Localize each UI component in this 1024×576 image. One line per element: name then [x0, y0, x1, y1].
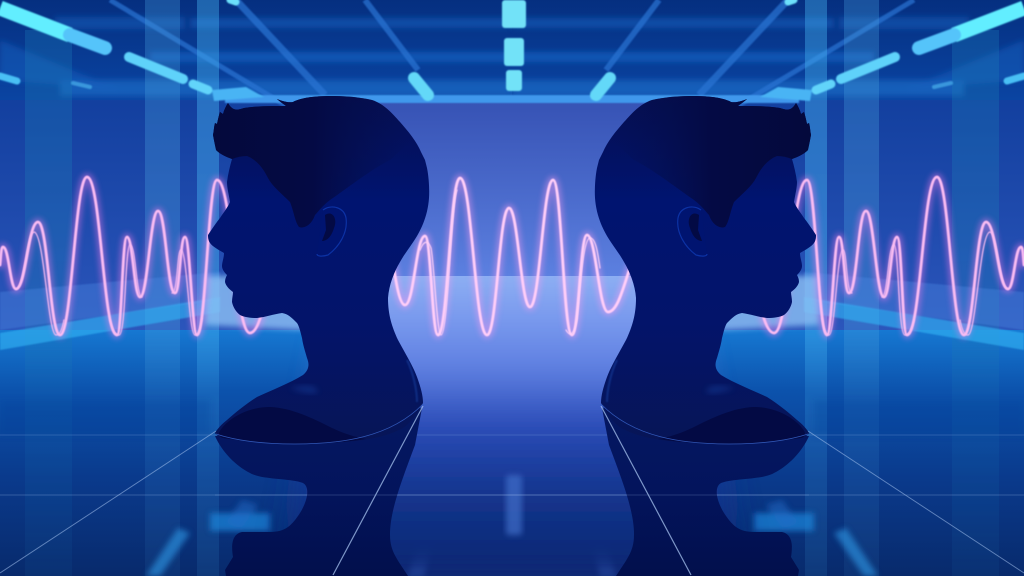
sound wave right: [744, 177, 1024, 335]
background room left half: [0, 0, 512, 576]
ceiling lights left: [0, 0, 428, 101]
head right: [595, 96, 816, 576]
ceiling lights right: [596, 0, 1024, 101]
centre floor: [306, 276, 718, 576]
sound wave left: [0, 177, 280, 335]
ceiling back glow: [225, 95, 799, 103]
sound wave centre: [392, 178, 634, 335]
back wall: [370, 100, 654, 276]
floor centre reflected light: [506, 475, 522, 535]
ceiling lights centre: [502, 0, 526, 91]
floor lines: [0, 431, 1024, 573]
head left: [208, 96, 429, 576]
background room right half: [512, 0, 1024, 576]
floor lines over reflections: [215, 406, 809, 575]
